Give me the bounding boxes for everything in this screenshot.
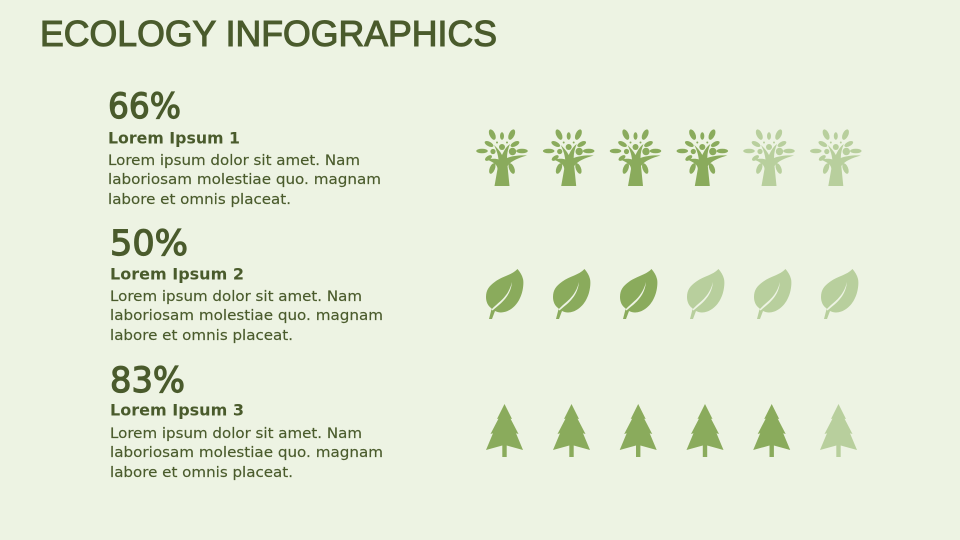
percentage 50%: 50% [110, 224, 188, 264]
title: ECOLOGY INFOGRAPHICS [40, 13, 497, 54]
heading: Lorem Ipsum 3: Lorem Ipsum 3 [110, 400, 244, 420]
description 3 [110, 426, 383, 481]
heading: Lorem Ipsum 2: Lorem Ipsum 2 [110, 264, 244, 284]
description 1: Lorem ipsum dolor sit amet. Nam [108, 153, 360, 169]
heading: Lorem Ipsum 1: Lorem Ipsum 1 [108, 128, 240, 148]
description 3: Lorem ipsum dolor sit amet. Nam [110, 426, 362, 442]
description 1 [108, 153, 381, 208]
percentage 83%: 83% [110, 361, 185, 401]
description 2: Lorem ipsum dolor sit amet. Nam [110, 289, 362, 305]
icons: trees 66% [476, 128, 862, 186]
panel: stat 1 text [108, 87, 381, 208]
description 2: laboriosam molestiae quo. magnam [110, 308, 383, 324]
description 3: laboriosam molestiae quo. magnam [110, 445, 383, 461]
description 1: laboriosam molestiae quo. magnam [108, 172, 381, 188]
panel: stat 2 text [110, 224, 383, 344]
icons: pine trees 83% [486, 404, 857, 457]
description 2: labore et omnis placeat. [110, 328, 293, 344]
panel: stat 3 text [110, 361, 383, 481]
description 3: labore et omnis placeat. [110, 465, 293, 481]
description 1: labore et omnis placeat. [108, 192, 291, 208]
percentage 66%: 66% [108, 87, 181, 127]
description 2 [110, 289, 383, 344]
icons: leaves 50% [486, 269, 858, 319]
